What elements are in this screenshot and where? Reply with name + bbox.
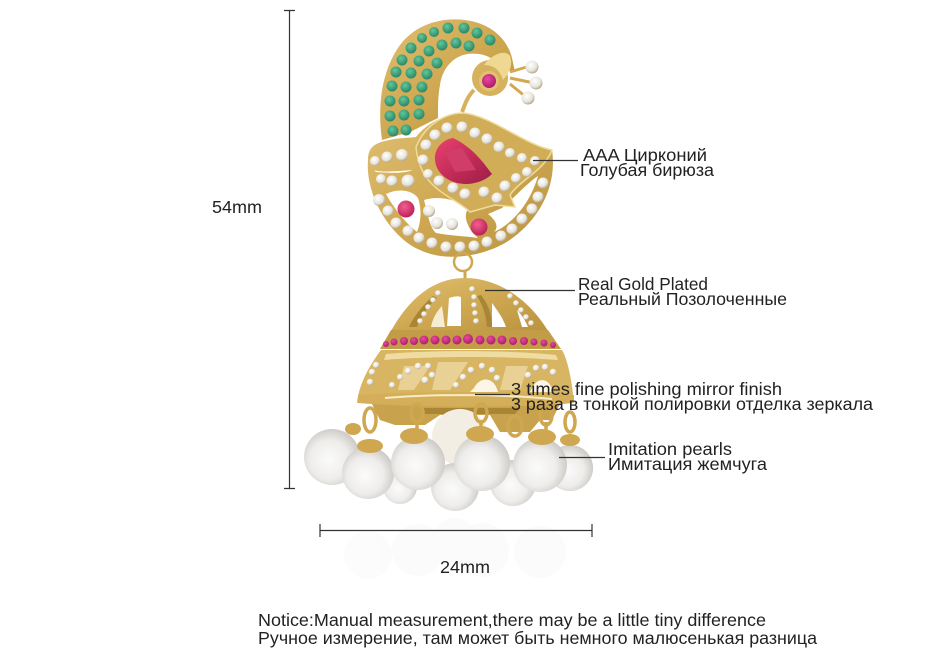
peacock body [368, 113, 553, 257]
callout: polishing: 3 times fine polishing mirror finish [511, 379, 782, 399]
peacock neck [380, 19, 515, 140]
dome shadows [409, 295, 492, 327]
callout: gold plating [485, 274, 787, 309]
callout: zirconia [533, 145, 714, 180]
peacock crown [510, 60, 542, 104]
upper dome [391, 278, 548, 331]
pearl caps [345, 423, 580, 453]
dome windows [431, 296, 528, 327]
height dimension line [284, 10, 295, 489]
polished rim [358, 392, 574, 407]
callout: pearls: Имитация жемчуга [608, 454, 767, 474]
pink accent stones [398, 200, 488, 236]
lower filigree openings [398, 362, 553, 392]
earring: jhumka dome [357, 278, 574, 407]
body cut-outs [374, 170, 538, 238]
earring: pearls behind [304, 409, 593, 511]
lower filigree [357, 350, 574, 403]
callout: zirconia: Голубая бирюза [580, 160, 714, 180]
earring: front pearls [342, 404, 593, 499]
paisley outline [416, 113, 552, 212]
earring: peacock stud [368, 19, 553, 257]
connecting ring [454, 253, 472, 280]
green pavé stones [384, 22, 496, 136]
dangling gold links [364, 404, 575, 438]
notice text: Ручное измерение, там может быть немного малюсенькая разница [258, 628, 817, 648]
callout: gold plating: Real Gold Plated [578, 274, 708, 294]
width label: 24mm [440, 557, 490, 577]
callout: pearls [559, 439, 767, 474]
callout: polishing [475, 379, 873, 414]
peacock head [462, 53, 511, 112]
callout: polishing: 3 раза в тонкой полировки отделка зеркала [511, 394, 873, 414]
lower pavé arches [367, 362, 556, 388]
dome pavé ribs [417, 286, 534, 326]
callout: zirconia: AAA Цирконий [583, 145, 707, 165]
white pavé stones [370, 122, 548, 252]
pink band [380, 330, 561, 349]
callout: pearls: Imitation pearls [608, 439, 732, 459]
height label: 54mm [212, 197, 262, 217]
gold links behind the pearls [372, 404, 560, 432]
pearls [342, 435, 593, 499]
width dimension line [320, 524, 592, 537]
notice text: Notice:Manual measurement,there may be a little tiny difference [258, 610, 766, 630]
red pear gem [435, 138, 492, 184]
callout: gold plating: Реальный Позолоченные [578, 289, 787, 309]
notice text [258, 610, 817, 648]
pearl reflection under the earring [344, 518, 566, 579]
